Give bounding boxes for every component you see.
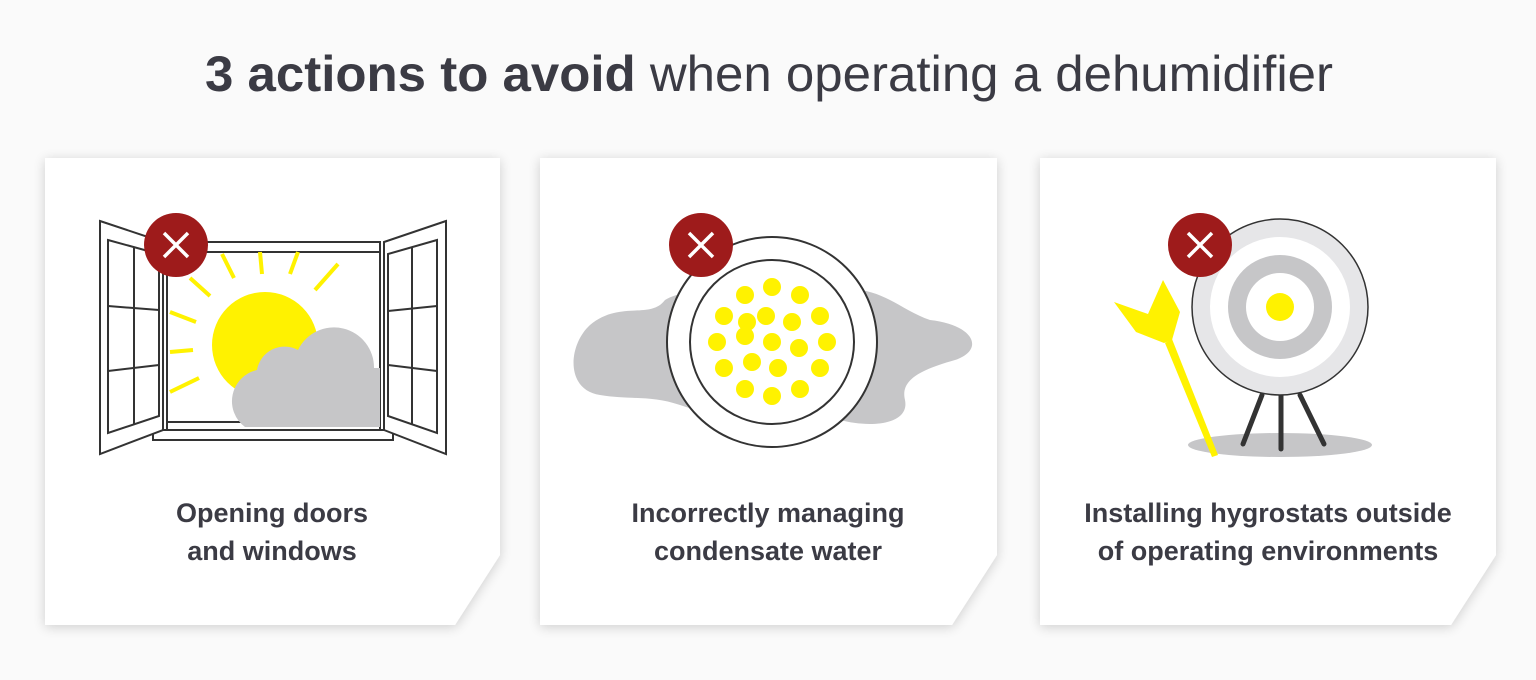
label: and windows xyxy=(187,536,357,566)
label: Installing hygrostats outside xyxy=(1084,498,1452,528)
label: of operating environments xyxy=(1098,536,1438,566)
icon: red x badge xyxy=(144,213,208,277)
label: Incorrectly managing xyxy=(631,498,905,528)
panel: hygrostats xyxy=(1040,158,1496,625)
label: Opening doors xyxy=(176,498,368,528)
icon: drain plate with dots xyxy=(667,237,877,447)
panel: condensate water xyxy=(540,158,997,625)
icon: puddle xyxy=(574,289,972,424)
icon: yellow arrow xyxy=(1114,280,1218,457)
icon: red x badge xyxy=(1168,213,1232,277)
title: 3 actions to avoid when operating a dehumidifier xyxy=(205,46,1333,102)
icon: red x badge xyxy=(669,213,733,277)
icon: target on tripod xyxy=(1188,219,1372,457)
label: condensate water xyxy=(654,536,883,566)
icon: open window with sun xyxy=(100,221,446,454)
panel: opening doors and windows xyxy=(45,158,500,625)
